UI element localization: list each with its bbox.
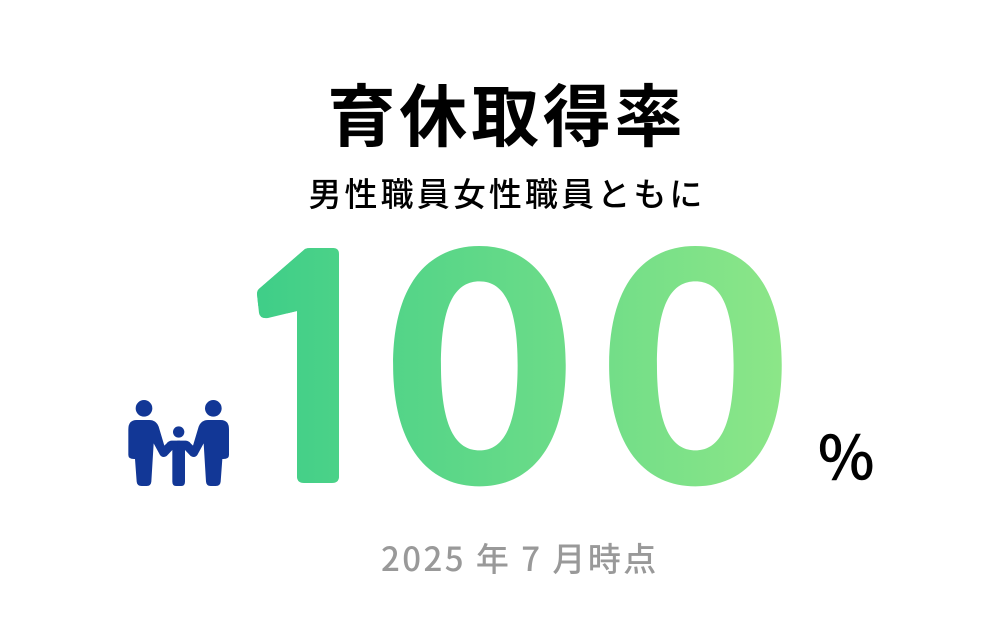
title: 育休取得率	[327, 80, 687, 156]
infographic	[128, 82, 872, 574]
big number: 100: 0	[594, 119, 797, 572]
big number: 100: 1	[208, 175, 397, 555]
big number: 100: 0	[378, 119, 581, 572]
footnote: date: 2025 年 7 月時点	[381, 533, 659, 581]
subtitle: 男性職員女性職員ともに	[308, 176, 706, 213]
big number: 100	[257, 246, 782, 486]
icon: family holding hands	[128, 400, 229, 486]
percent sign: %	[818, 410, 874, 497]
